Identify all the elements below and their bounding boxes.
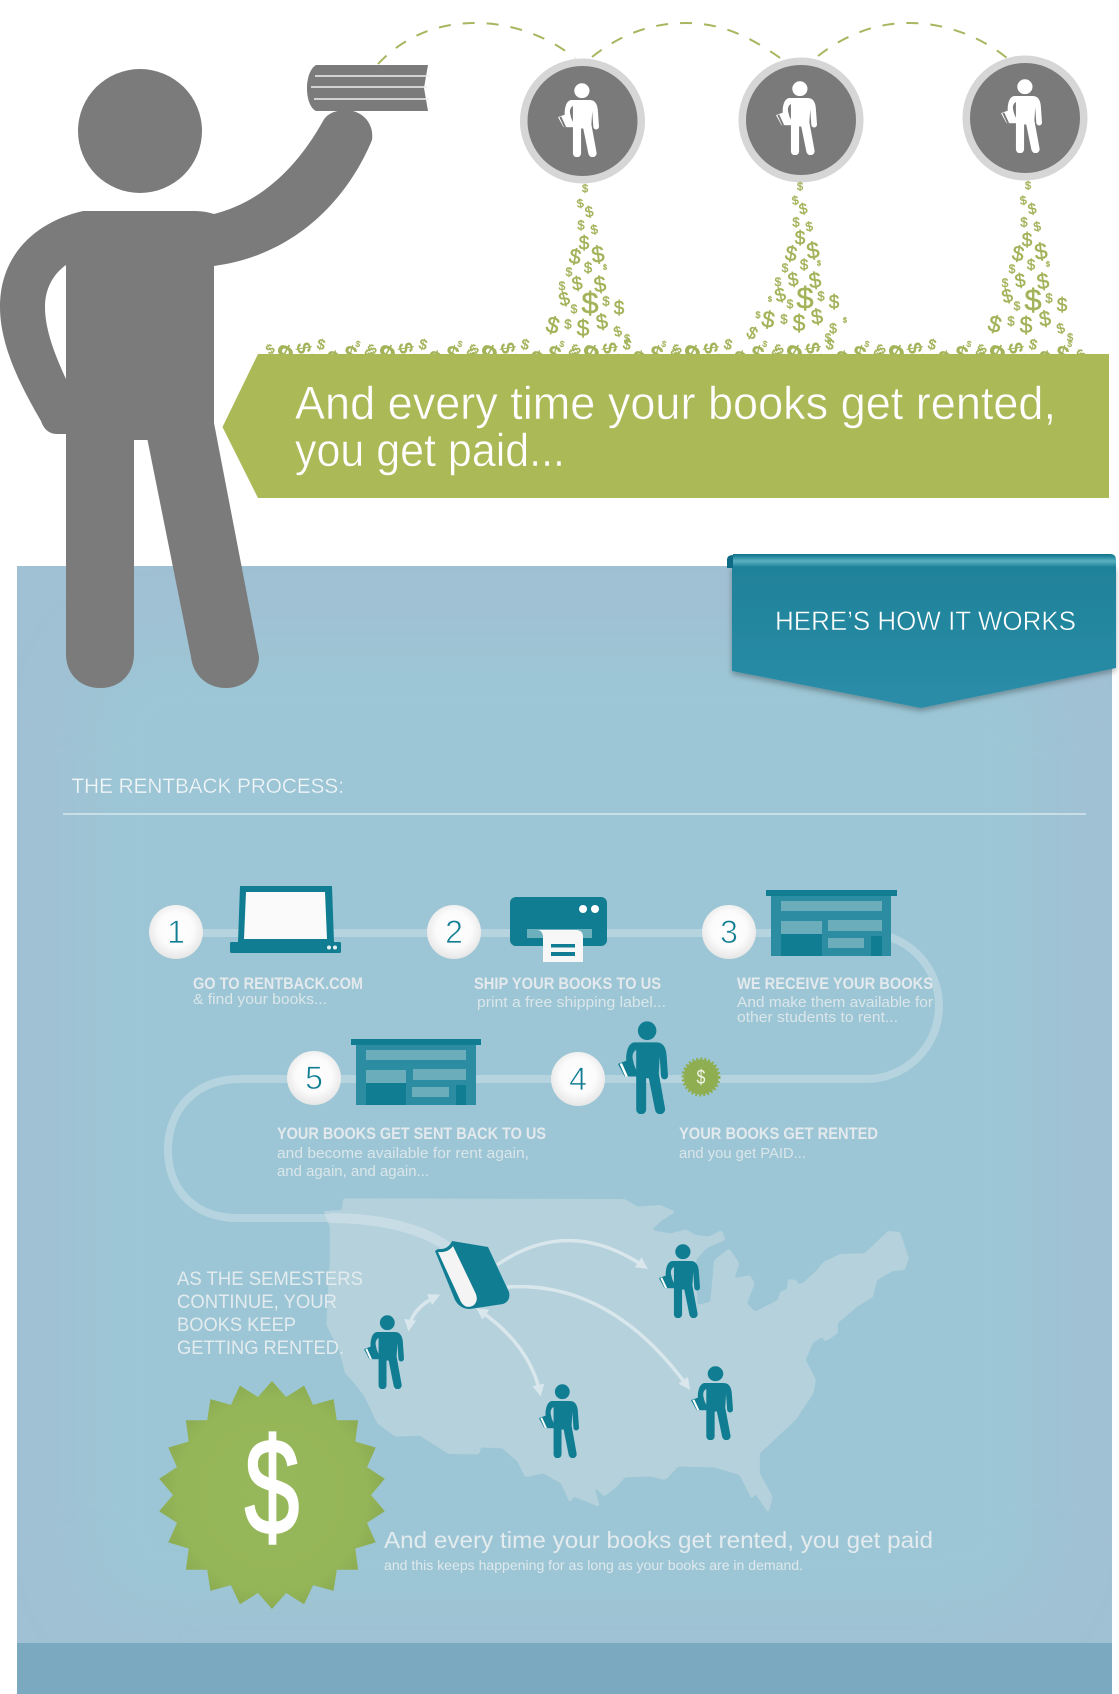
dollar pile along banner: $: [467, 340, 482, 358]
dollar stream 1: $: [557, 288, 573, 311]
dollar pile along banner: [263, 336, 1089, 379]
dollar pile along banner: $: [354, 339, 362, 349]
step 5: your books get sent back: [277, 1039, 546, 1180]
dollar stream 3: $: [1033, 237, 1049, 265]
dollar stream 3: $: [1055, 319, 1067, 337]
dollar pile along banner: $: [800, 341, 824, 355]
dollar stream 1: $: [579, 234, 590, 254]
dollar pile along banner: $: [932, 345, 954, 375]
dollar pile along banner: $: [305, 349, 320, 379]
step 4: your books get rented: and you get PAID...: [679, 1145, 806, 1162]
dollar stream 1: $: [612, 322, 624, 340]
banner: and every time your books get rented: you get paid...: [295, 424, 565, 476]
dollar pile along banner: $: [1074, 345, 1089, 363]
dollar pile along banner: $: [442, 340, 463, 370]
step 3: we receive your books: And make them available for: [737, 994, 933, 1011]
dollar pile along banner: $: [365, 340, 380, 358]
dollar stream 3: $: [1010, 242, 1026, 267]
dollar pile along banner: $: [673, 336, 707, 376]
dollar pile along banner: $: [712, 349, 727, 379]
dollar pile along banner: $: [722, 336, 735, 354]
dollar stream 1: [543, 183, 630, 345]
dollar pile along banner: $: [266, 336, 300, 376]
dollar stream 3: $: [1027, 256, 1036, 274]
dollar pile along banner: $: [1052, 340, 1073, 370]
step 5: your books get sent back: 5: [305, 1060, 323, 1096]
dollar stream 3: $: [1020, 214, 1028, 230]
text: as the semesters continue: BOOKS KEEP: [177, 1315, 296, 1336]
map: united states: [323, 1198, 909, 1513]
dollar stream 3: $: [1000, 285, 1016, 308]
dollar stream 3: $: [1024, 282, 1042, 318]
step 1: go to rentback.com: & find your books...: [193, 991, 327, 1008]
icon: student north: [659, 1244, 700, 1318]
icon: grey book: [307, 65, 430, 111]
dollar stream 1: $: [614, 298, 625, 320]
dollar stream 2: $: [783, 242, 799, 267]
dollar pile along banner: $: [973, 345, 988, 363]
step 5: your books get sent back: YOUR BOOKS GET SENT BACK TO US: [277, 1124, 546, 1143]
dollar pile along banner: $: [775, 336, 809, 376]
dollar stream 3: $: [1032, 218, 1043, 234]
dollar stream 2: $: [760, 305, 777, 333]
icon: student west: [364, 1315, 404, 1389]
dollar pile along banner: $: [572, 336, 606, 376]
dollar stream 2: $: [795, 228, 806, 250]
dollar pile along banner: $: [1027, 336, 1040, 354]
dollar stream 3: $: [1002, 276, 1009, 290]
icon: large dollar badge: [159, 1381, 385, 1609]
dollar pile along banner: $: [362, 345, 377, 363]
arrows from book to students: [409, 1240, 688, 1393]
dollar stream 2: $: [817, 260, 821, 268]
dollar stream 1: $: [584, 203, 595, 221]
dollar pile along banner: $: [569, 340, 584, 358]
text: as the semesters continue: [177, 1269, 363, 1359]
dollar stream 3: $: [1057, 296, 1068, 316]
dollar pile along banner: $: [470, 336, 504, 376]
dollar pile along banner: $: [698, 341, 722, 355]
icon: warehouse: [766, 890, 897, 956]
panel: blue process background: [17, 566, 1112, 1694]
dollar pile along banner: $: [863, 339, 871, 349]
step 4: your books get rented: [551, 1021, 878, 1162]
dollar stream 1: $: [602, 294, 610, 308]
dollar stream 1: $: [603, 264, 607, 272]
dollar stream 3: $: [1020, 312, 1033, 338]
dollar stream 1: $: [624, 333, 630, 345]
dollar stream 2: $: [792, 214, 800, 230]
dollar stream 2: $: [843, 318, 847, 324]
dollar stream 1: $: [582, 183, 588, 195]
dollar stream 2: $: [800, 256, 809, 274]
dollar stream 1: $: [576, 196, 585, 211]
dollar pile along banner: $: [902, 341, 926, 355]
dollar pile along banner: $: [926, 336, 939, 354]
icon: laptop: [230, 886, 341, 953]
dollar stream 1: $: [590, 240, 606, 268]
dollar pile along banner: $: [315, 336, 328, 354]
heading: the rentback process: THE RENTBACK PROCESS:: [72, 775, 344, 798]
dollar pile along banner: $: [456, 339, 464, 349]
dollar stream 2: $: [773, 284, 789, 307]
dollar stream 1: $: [571, 302, 578, 316]
dollar pile along banner: $: [525, 345, 547, 375]
dollar pile along banner: $: [874, 340, 889, 358]
dollar pile along banner: $: [519, 336, 532, 354]
step 3: we receive your books: 3: [720, 914, 738, 950]
text: as the semesters continue: CONTINUE, YOUR: [177, 1292, 337, 1313]
dollar stream 3: $: [1022, 230, 1033, 252]
dollar stream 3: $: [1019, 193, 1028, 208]
dollar pile along banner: $: [1033, 345, 1055, 375]
dollar stream 2: $: [797, 181, 803, 193]
dollar stream 3: $: [1045, 290, 1053, 306]
dollar stream 2: $: [804, 218, 815, 234]
icon: small dollar badge: [683, 1059, 719, 1095]
dollar stream 2: $: [793, 310, 806, 336]
dollar stream 2: $: [796, 280, 814, 316]
dollar pile along banner: $: [747, 340, 768, 370]
dollar pile along banner: $: [668, 345, 683, 363]
dollar stream 3: [985, 180, 1073, 344]
dollar stream 2: [743, 181, 847, 345]
dollar pile along banner: $: [660, 339, 668, 349]
dollar stream 3: $: [1009, 262, 1016, 276]
step 2: ship your books: [427, 897, 666, 1011]
icon: renter circle 1: [520, 58, 645, 184]
dollar stream 2: $: [782, 261, 789, 275]
dollar stream 1: $: [543, 311, 563, 339]
step 5: your books get sent back: and become available for rent again,: [277, 1145, 529, 1162]
dollar stream 3: $: [1025, 180, 1031, 192]
dollar pile along banner: $: [965, 339, 973, 349]
dollar pile along banner: $: [814, 349, 829, 379]
dollar pile along banner: $: [340, 340, 361, 370]
dollar pile along banner: $: [597, 341, 621, 355]
step 2: ship your books: print a free shipping label...: [477, 994, 666, 1011]
dollar pile along banner: $: [1017, 349, 1032, 379]
dollar pile along banner: $: [566, 345, 581, 363]
dollar pile along banner: $: [509, 349, 524, 379]
dollar pile along banner: $: [769, 345, 784, 363]
dollar pile along banner: $: [291, 341, 315, 355]
dollar stream 3: $: [1038, 307, 1053, 331]
text: as the semesters continue: AS THE SEMESTERS: [177, 1269, 363, 1290]
dollar stream 3: $: [1007, 314, 1015, 328]
icon: warehouse: [351, 1039, 481, 1105]
ribbon: here's how it works: [727, 554, 1116, 708]
dollar stream 2: $: [786, 269, 800, 291]
icon: small dollar badge: $: [697, 1066, 705, 1088]
dollar pile along banner: $: [670, 340, 685, 358]
icon: student east: [691, 1366, 733, 1440]
dollar pile along banner: $: [544, 340, 565, 370]
dollar stream 1: $: [577, 315, 590, 341]
dollar pile along banner: $: [772, 340, 787, 358]
dollar pile along banner: $: [761, 339, 769, 349]
step 3: we receive your books: [702, 890, 933, 1026]
dollar stream 2: $: [791, 193, 800, 208]
dollar pile along banner: $: [1003, 341, 1027, 355]
dollar stream 1: $: [592, 271, 608, 297]
step 1: go to rentback.com: GO TO RENTBACK.COM: [193, 974, 363, 993]
dollar stream 2: $: [787, 297, 794, 311]
dollar pile along banner: $: [871, 345, 886, 363]
dollar pile along banner: $: [978, 336, 1012, 376]
step 3: we receive your books: WE RECEIVE YOUR BOOKS: [737, 974, 933, 993]
dollar stream 3: $: [1046, 262, 1050, 268]
dollar pile along banner: $: [1066, 339, 1074, 349]
dollar pile along banner: $: [916, 349, 931, 379]
dollar stream 1: $: [595, 310, 610, 334]
dollar stream 1: $: [577, 218, 585, 232]
dollar stream 2: $: [755, 310, 761, 320]
dollar pile along banner: $: [849, 340, 870, 370]
dollar stream 3: $: [1035, 268, 1051, 294]
dollar pile along banner: $: [824, 336, 837, 354]
dollar pile along banner: $: [627, 345, 649, 375]
closing text: [384, 1527, 933, 1573]
icon: student with book: [618, 1021, 668, 1114]
dollar stream 3: $: [1014, 299, 1021, 313]
step 4: your books get rented: YOUR BOOKS GET RENTED: [679, 1124, 878, 1143]
dollar stream 1: $: [567, 245, 583, 270]
dollar stream 2: $: [829, 320, 837, 336]
dollar stream 3: $: [1027, 200, 1038, 218]
dollar pile along banner: $: [558, 339, 566, 349]
dollar pile along banner: $: [975, 340, 990, 358]
dollar pile along banner: $: [321, 345, 343, 375]
ribbon: here's how it works: HERE’S HOW IT WORKS: [775, 606, 1076, 636]
icon: large dollar badge: $: [245, 1411, 299, 1564]
icon: renter circle 2: [738, 58, 864, 182]
dollar pile along banner: $: [495, 341, 519, 355]
dollar stream 1: $: [564, 316, 572, 332]
dollar stream 1: $: [589, 221, 600, 237]
dollar stream 1: $: [559, 279, 566, 293]
dollar pile along banner: $: [830, 345, 852, 375]
banner: and every time your books get rented: [222, 354, 1109, 498]
dollar pile along banner: $: [621, 336, 634, 354]
step 4: your books get rented: 4: [569, 1061, 587, 1097]
dollar stream 2: $: [775, 275, 782, 289]
dollar pile along banner: $: [368, 336, 402, 376]
dollar stream 1: $: [566, 265, 573, 279]
dollar pile along banner: $: [407, 349, 422, 379]
dollar pile along banner: $: [951, 340, 972, 370]
dollar stream 2: $: [829, 292, 840, 314]
dashed arcs between renters: [378, 23, 1007, 64]
dollar stream 2: $: [817, 288, 825, 304]
dollar stream 3: $: [1013, 270, 1027, 292]
icon: student south: [539, 1384, 579, 1458]
dollar stream 2: $: [807, 267, 823, 293]
step 5: your books get sent back: and again, and again...: [277, 1163, 429, 1180]
text: as the semesters continue: GETTING RENTED.: [177, 1338, 344, 1359]
dollar stream 2: $: [825, 331, 832, 345]
dollar stream 2: $: [780, 312, 788, 326]
closing text: and this keeps happening for as long as your books are in demand.: [384, 1557, 803, 1573]
dollar stream 1: $: [584, 260, 593, 276]
icon: large figure holding book: [0, 69, 372, 688]
dollar pile along banner: $: [423, 345, 445, 375]
footer band: [17, 1643, 1112, 1694]
dollar stream 1: $: [570, 273, 584, 295]
dollar pile along banner: $: [877, 336, 911, 376]
dollar pile along banner: $: [728, 345, 750, 375]
dollar pile along banner: $: [464, 345, 479, 363]
icon: teal book: [435, 1241, 509, 1309]
step 3: we receive your books: other students to rent...: [737, 1009, 898, 1026]
dollar pile along banner: $: [393, 341, 417, 355]
dollar pile along banner: $: [611, 349, 626, 379]
closing text: And every time your books get rented, you get paid: [384, 1527, 933, 1553]
dollar pile along banner: $: [417, 336, 430, 354]
step 2: ship your books: SHIP YOUR BOOKS TO US: [474, 974, 661, 993]
banner: and every time your books get rented: And every time your books get rented,: [295, 377, 1056, 429]
icon: renter circle 3: [962, 56, 1088, 180]
dollar stream 1: $: [581, 286, 599, 320]
dollar stream 2: $: [810, 305, 825, 329]
dollar stream 2: $: [798, 200, 809, 218]
step 1: go to rentback.com: 1: [167, 914, 185, 950]
dollar pile along banner: $: [646, 340, 667, 370]
step 1: go to rentback.com: [149, 886, 363, 1008]
dollar stream 2: $: [743, 323, 761, 344]
dollar stream 3: $: [1067, 332, 1073, 344]
dollar stream 3: $: [985, 310, 1005, 338]
dollar stream 2: $: [768, 296, 772, 304]
dollar stream 2: $: [805, 236, 821, 264]
dollar pile along banner: $: [263, 340, 278, 358]
icon: printer: [510, 897, 607, 962]
process path: [168, 933, 939, 1250]
step 2: ship your books: 2: [445, 914, 463, 950]
